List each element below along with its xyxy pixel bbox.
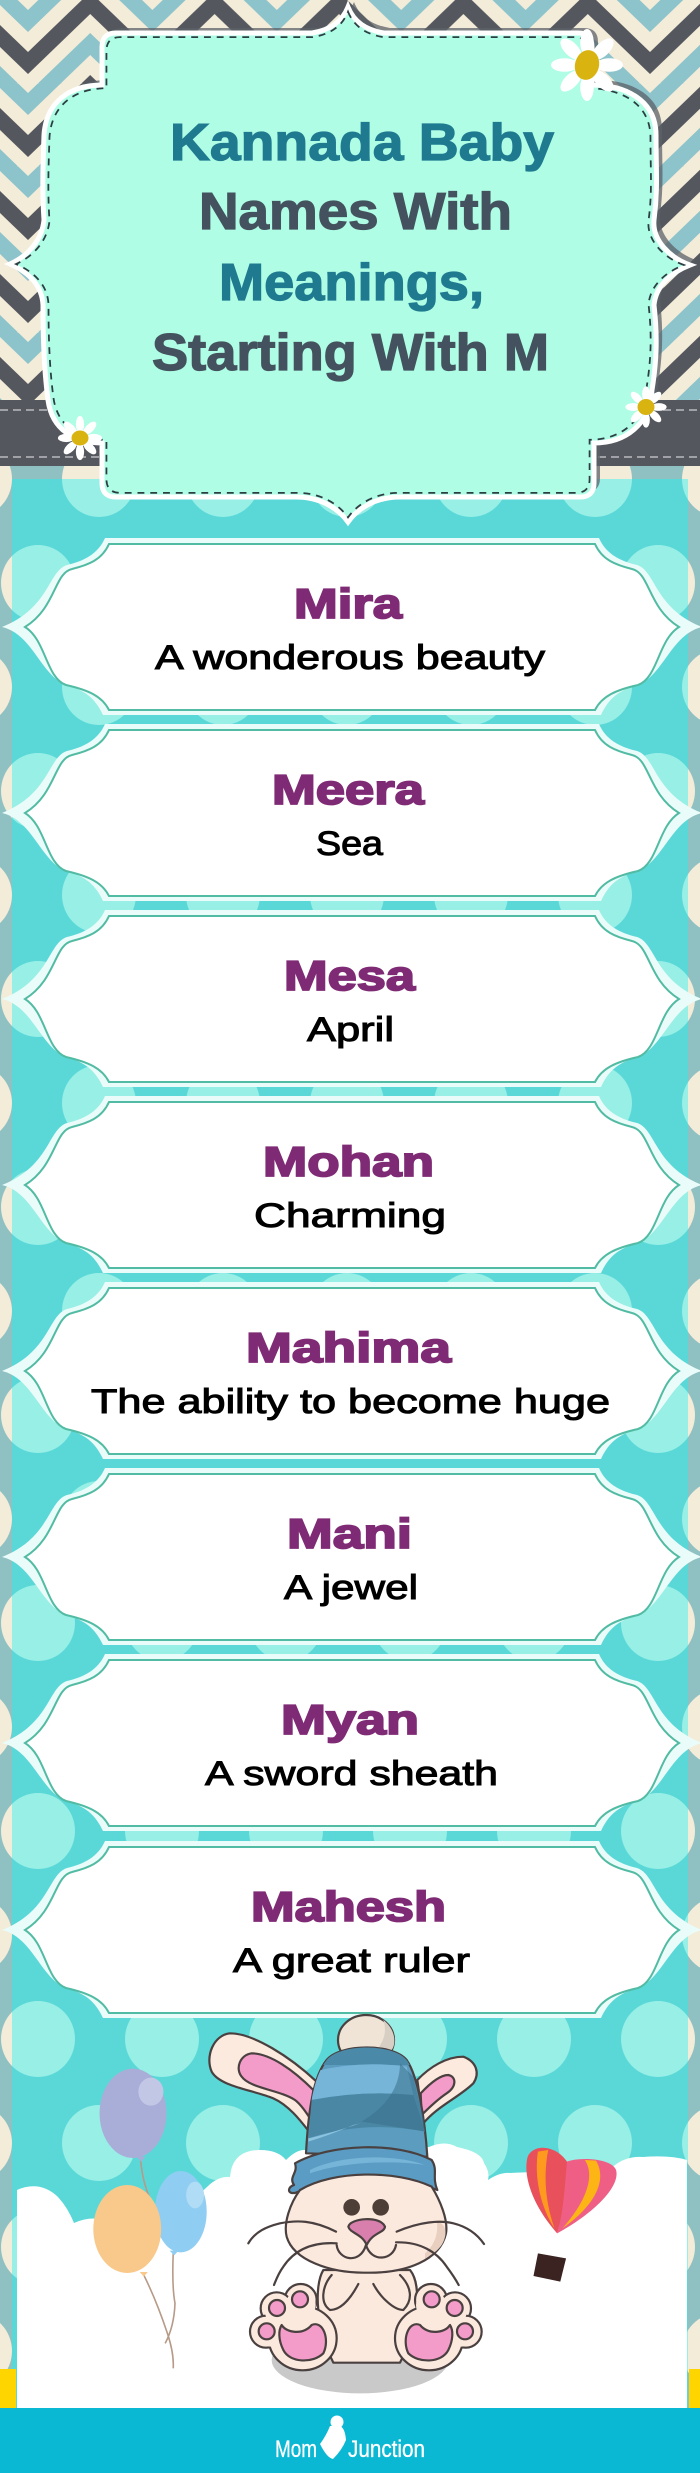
icon: heart balloon bbox=[526, 2148, 617, 2233]
card: Mohan bbox=[2, 1096, 700, 1273]
yellow corner accents bbox=[0, 2369, 700, 2409]
icon: bunny bbox=[209, 2015, 484, 2393]
background: chevron header pattern bbox=[0, 0, 700, 404]
card: Mesa: April bbox=[307, 1011, 394, 1049]
title: Starting With M bbox=[152, 324, 549, 382]
icon: daisy lower left bbox=[58, 416, 102, 460]
panel: title plaque bbox=[10, 2, 696, 522]
card: Mahima: Mahima bbox=[246, 1324, 452, 1371]
card: Myan bbox=[2, 1654, 700, 1831]
title: Kannada Baby bbox=[170, 114, 554, 172]
card: Mesa: Mesa bbox=[284, 952, 416, 999]
card: Myan: A sword sheath bbox=[205, 1755, 498, 1793]
icon: balloon basket bbox=[533, 2253, 566, 2282]
background: teal polka dot panel bbox=[12, 479, 688, 2409]
card: Mani bbox=[2, 1468, 700, 1645]
title bbox=[152, 114, 554, 382]
icon: balloons bbox=[93, 2069, 207, 2368]
card: Mira bbox=[2, 538, 700, 715]
card: Mira: A wonderous beauty bbox=[155, 639, 545, 677]
card: Mahesh: Mahesh bbox=[251, 1883, 446, 1930]
footer logo bbox=[275, 2416, 425, 2463]
card: Mira: Mira bbox=[294, 580, 403, 627]
footer logo: Junction bbox=[348, 2436, 425, 2463]
card: Meera: Meera bbox=[272, 766, 425, 813]
card: Mesa bbox=[2, 910, 700, 1087]
icon: daisy top right bbox=[551, 29, 623, 101]
card: Mohan: Mohan bbox=[263, 1138, 434, 1185]
footer logo: Mom bbox=[275, 2436, 317, 2463]
card: Mahesh bbox=[2, 1841, 700, 2018]
illustration group (balloons, heart balloon) bbox=[93, 2069, 617, 2368]
card: Mani: Mani bbox=[287, 1510, 412, 1557]
dark stitched ribbon band bbox=[0, 400, 700, 466]
footer bar bbox=[0, 2408, 700, 2473]
title: Names With bbox=[199, 183, 512, 241]
card: Mahesh: A great ruler bbox=[233, 1942, 470, 1980]
card: Mahima: The ability to become huge bbox=[91, 1383, 610, 1421]
white cloud ground bbox=[17, 2144, 687, 2408]
card: Meera bbox=[2, 724, 700, 901]
card: Mohan: Charming bbox=[254, 1197, 446, 1235]
card: Mani: A jewel bbox=[284, 1569, 418, 1607]
card: Meera: Sea bbox=[316, 825, 383, 863]
background: grey edge strips with cream dots bbox=[0, 465, 700, 2410]
card: Myan: Myan bbox=[281, 1696, 419, 1743]
icon: daisy lower right bbox=[625, 386, 667, 428]
title: Meanings, bbox=[219, 254, 484, 312]
card: Mahima bbox=[2, 1282, 700, 1459]
